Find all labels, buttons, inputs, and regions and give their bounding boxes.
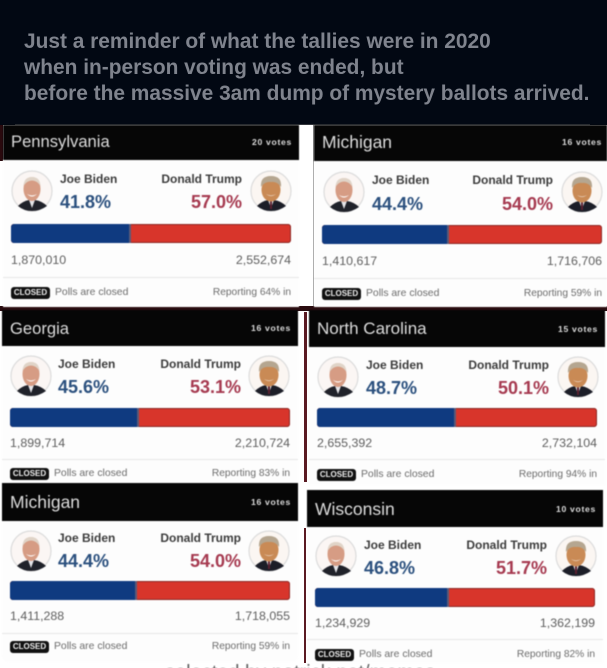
panel: Michigan (bottom): 54.0% <box>190 551 241 571</box>
divider line between top-row columns <box>313 125 314 310</box>
panel: Pennsylvania: CLOSED <box>14 288 47 297</box>
panel: Pennsylvania <box>3 125 299 307</box>
panel: Georgia <box>2 310 298 483</box>
panel: Michigan (top): Joe Biden <box>372 173 429 187</box>
panel: Wisconsin: Polls are closed <box>359 649 432 660</box>
panel: Wisconsin: Donald Trump <box>466 538 547 552</box>
panel: Michigan (top) <box>314 125 607 307</box>
panel: North Carolina: 15 votes <box>558 324 598 334</box>
dark band under top-row panels <box>0 306 607 311</box>
panel: Georgia: 2,210,724 <box>235 436 290 450</box>
panel: Wisconsin: 10 votes <box>556 504 596 514</box>
panel: North Carolina: 2,655,392 <box>317 436 372 450</box>
panel: Michigan (top): 44.4% <box>372 194 423 214</box>
panel: Michigan (bottom): 44.4% <box>58 551 109 571</box>
panel: Pennsylvania: Donald Trump <box>161 172 242 186</box>
panel: Michigan (top): Polls are closed <box>366 288 439 299</box>
panel: Michigan (bottom): Michigan <box>10 492 80 512</box>
panel: Georgia: 53.1% <box>190 377 241 397</box>
panel: Michigan (top): 54.0% <box>502 194 553 214</box>
panel: Michigan (bottom): 16 votes <box>251 497 291 507</box>
panel: Pennsylvania: 1,870,010 <box>11 253 66 267</box>
panel: North Carolina: Donald Trump <box>468 358 549 372</box>
panel: Pennsylvania: 2,552,674 <box>236 253 291 267</box>
panel: Georgia: Joe Biden <box>58 357 115 371</box>
panel: Wisconsin: 51.7% <box>496 558 547 578</box>
panel: Michigan (bottom): 1,411,288 <box>10 609 64 623</box>
panel: North Carolina: 48.7% <box>366 378 417 398</box>
panel: North Carolina: North Carolina <box>317 319 427 338</box>
panel: North Carolina: 50.1% <box>498 378 549 398</box>
dark top background <box>0 0 607 125</box>
headline text: when in-person voting was ended, but <box>24 56 404 79</box>
headline text: Just a reminder of what the tallies were in 2020 <box>24 30 491 53</box>
headline text: before the massive 3am dump of mystery ballots arrived. <box>24 82 589 105</box>
left dark edge strip <box>0 125 3 161</box>
panel: Michigan (top): Reporting 59% in <box>524 288 602 299</box>
panel: Michigan (bottom): Joe Biden <box>58 531 115 545</box>
panel: Pennsylvania: Joe Biden <box>60 172 117 186</box>
panel: Michigan (top): CLOSED <box>325 289 358 298</box>
panel: Pennsylvania: 57.0% <box>191 192 242 212</box>
panel: Wisconsin: 1,234,929 <box>315 616 370 630</box>
panel: Michigan (top): Donald Trump <box>472 173 553 187</box>
panel: Georgia: Georgia <box>10 319 69 338</box>
panel: Wisconsin: Joe Biden <box>364 538 421 552</box>
panel: Michigan (top): 1,410,617 <box>322 254 377 268</box>
panel: Michigan (bottom): 1,718,055 <box>235 609 290 623</box>
panel: Georgia: Reporting 83% in <box>212 468 290 479</box>
dark red edge beside North Carolina panel <box>304 312 307 482</box>
panel: Georgia: Polls are closed <box>54 468 127 479</box>
panel: Michigan (bottom): Polls are closed <box>54 641 127 652</box>
panel: Wisconsin: 1,362,199 <box>540 616 595 630</box>
panel: North Carolina: Polls are closed <box>361 469 434 480</box>
panel: Michigan (top): Michigan <box>322 132 392 152</box>
panel: Wisconsin: Wisconsin <box>315 499 395 519</box>
panel: Michigan (bottom): CLOSED <box>13 642 46 651</box>
panel: Wisconsin: 46.8% <box>364 558 415 578</box>
panel: Georgia: Donald Trump <box>160 357 241 371</box>
panel: Michigan (top): 16 votes <box>562 137 602 147</box>
panel: Pennsylvania: Pennsylvania <box>11 132 110 151</box>
panel: Pennsylvania: Polls are closed <box>55 287 128 298</box>
panel: Pennsylvania: Reporting 64% in <box>213 287 291 298</box>
panel: Michigan (bottom) <box>2 483 298 662</box>
dark red edge beside Wisconsin panel <box>304 528 306 663</box>
panel: Pennsylvania: 41.8% <box>60 192 111 212</box>
panel: Michigan (top): 1,716,706 <box>547 254 602 268</box>
panel: Wisconsin: Reporting 82% in <box>517 649 595 660</box>
panel: Georgia: 16 votes <box>251 323 291 333</box>
panel: Georgia: CLOSED <box>13 469 46 478</box>
panel: North Carolina: Joe Biden <box>366 358 423 372</box>
panel: North Carolina: 2,732,104 <box>542 436 597 450</box>
panel: Georgia: 45.6% <box>58 377 109 397</box>
faint line above panels <box>15 124 590 125</box>
panel: North Carolina <box>309 310 605 485</box>
panel: Georgia: 1,899,714 <box>10 436 65 450</box>
panel: Wisconsin <box>307 490 603 663</box>
panel: Michigan (bottom): Reporting 59% in <box>212 641 290 652</box>
panel: Pennsylvania: 20 votes <box>252 137 292 147</box>
panel: Michigan (bottom): Donald Trump <box>160 531 241 545</box>
headline text <box>24 30 589 105</box>
panel: North Carolina: Reporting 94% in <box>519 469 597 480</box>
panel: North Carolina: CLOSED <box>320 470 353 479</box>
panel: Wisconsin: CLOSED <box>318 650 351 659</box>
